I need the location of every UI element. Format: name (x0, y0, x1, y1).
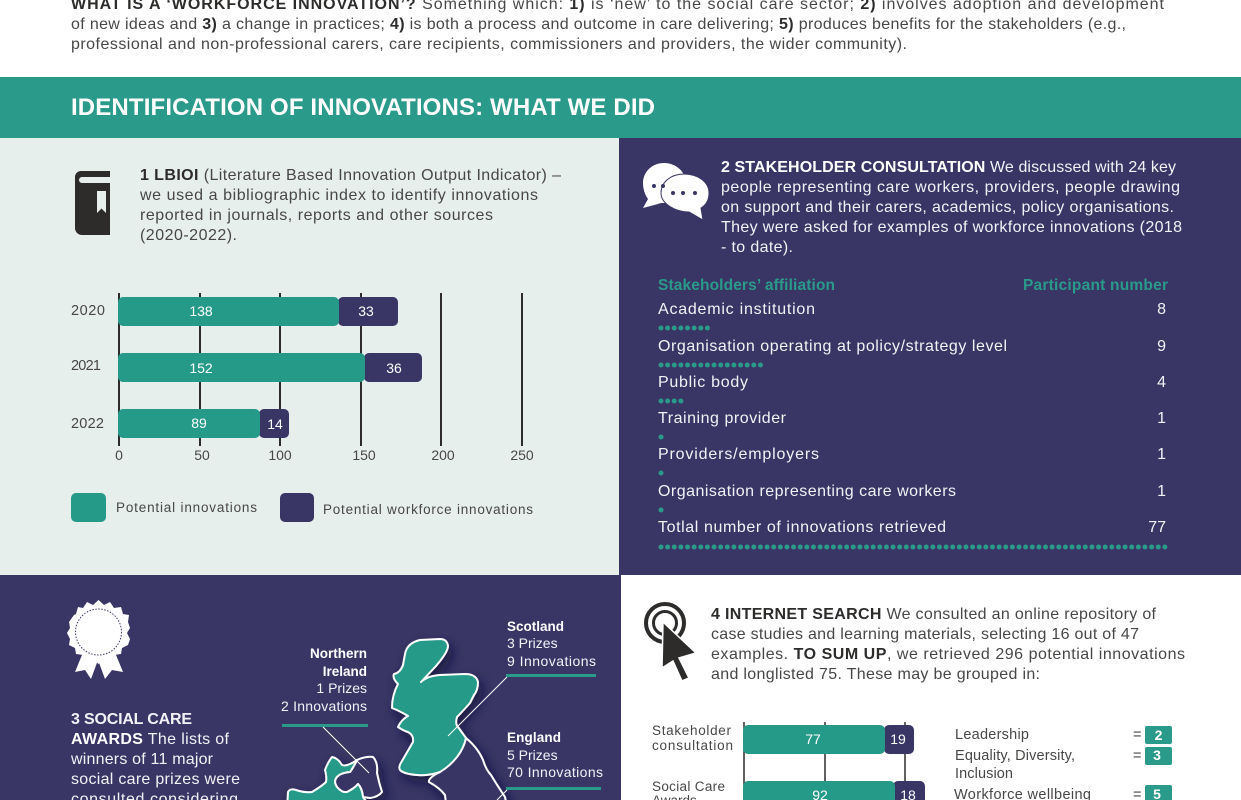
panel: stakeholder consultation (619, 138, 1241, 575)
internet search description: case studies and learning materials, selecting 16 out of 47 (711, 626, 1139, 643)
innovation groups list: Inclusion (955, 766, 1013, 782)
stakeholder table: 4 (1157, 374, 1166, 391)
intro definition text: of new ideas and 3) a change in practices; 4) is both a process and outcome in care delivering; 5) produces benefits for the stakeholders (e.g., (71, 16, 1126, 33)
LBIOI description (139, 167, 561, 244)
LBIOI description: we used a bibliographic index to identify innovations (139, 187, 538, 204)
callout: England (497, 730, 603, 800)
consultation description: on support and their carers, academics, policy organisations. (721, 199, 1174, 216)
stacked bar chart: innovations per year: 2020 (71, 303, 105, 319)
callout: Northern Ireland: Northern (310, 646, 367, 661)
legend (71, 493, 533, 522)
bar chart: sources (652, 722, 925, 800)
bar chart: sources: Social Care (652, 779, 725, 794)
callout: Scotland: 9 Innovations (507, 653, 596, 669)
consultation description: 2 STAKEHOLDER CONSULTATION We discussed with 24 key (721, 159, 1176, 176)
innovation groups list: = (1133, 748, 1141, 764)
stakeholder table: 1 (1157, 483, 1166, 500)
callout: Northern Ireland: 1 Prizes (316, 680, 367, 696)
stacked bar chart: innovations per year: 2022 (71, 416, 104, 432)
intro definition text (71, 0, 1165, 53)
stacked bar chart: innovations per year (71, 293, 534, 463)
stacked bar chart: innovations per year: 150 (352, 447, 376, 463)
awards description (70, 711, 240, 800)
stakeholder table: 1 (1157, 410, 1166, 427)
stakeholder table: Organisation operating at policy/strategy level (658, 338, 1007, 355)
stacked bar chart: innovations per year: 200 (431, 447, 455, 463)
heading band (0, 77, 1241, 138)
LBIOI description: (2020-2022). (140, 227, 237, 244)
stakeholder table: 9 (1157, 338, 1166, 355)
callout: England: England (507, 730, 561, 745)
innovation groups list: 2 (1155, 727, 1163, 743)
callout: Northern Ireland: 2 Innovations (281, 698, 367, 714)
consultation description: people representing care workers, providers, people drawing (721, 179, 1180, 196)
legend: Potential innovations (116, 500, 257, 515)
innovation groups list: Leadership (955, 727, 1029, 743)
stacked bar chart: innovations per year: 14 (267, 416, 283, 432)
stacked bar chart: innovations per year: 50 (194, 447, 210, 463)
stakeholder table: Organisation representing care workers (658, 483, 956, 500)
innovation groups list (954, 726, 1172, 800)
innovation groups list: Equality, Diversity, (955, 748, 1075, 764)
awards description: 3 SOCIAL CARE (71, 711, 192, 728)
panel: internet search (621, 575, 1241, 800)
stacked bar chart: innovations per year: 100 (268, 447, 292, 463)
icon: award rosette (67, 600, 130, 679)
icon: chat bubbles (643, 163, 709, 220)
stacked bar chart: innovations per year: 89 (191, 415, 207, 431)
callout: Northern Ireland: Ireland (323, 664, 367, 679)
icon: cursor click (646, 604, 696, 681)
LBIOI description: reported in journals, reports and other sources (140, 207, 493, 224)
awards description: AWARDS The lists of (71, 731, 230, 748)
innovation groups list: = (1133, 727, 1141, 743)
consultation description: They were asked for examples of workforce innovations (2018 (721, 219, 1182, 236)
bar chart: sources: Stakeholder (652, 723, 732, 738)
LBIOI description: 1 LBIOI (Literature Based Innovation Output Indicator) – (140, 167, 561, 184)
stacked bar chart: innovations per year: 0 (115, 447, 123, 463)
consultation description: - to date). (721, 239, 793, 256)
stakeholder table: Public body (658, 374, 748, 391)
panel: LBIOI (0, 138, 619, 575)
stacked bar chart: innovations per year: 152 (189, 360, 213, 376)
awards description: social care prizes were (71, 771, 240, 788)
stacked bar chart: innovations per year: 138 (189, 303, 213, 319)
heading band: IDENTIFICATION OF INNOVATIONS: WHAT WE DID (71, 94, 655, 121)
stakeholder table: Participant number (1023, 277, 1168, 294)
bar chart: sources: consultation (652, 738, 733, 753)
stakeholder table: Academic institution (658, 301, 815, 318)
callout: England: 70 Innovations (507, 764, 603, 780)
callout: Scotland: Scotland (507, 619, 564, 634)
callout: Scotland: 3 Prizes (507, 635, 558, 651)
callout: Northern Ireland (281, 646, 369, 773)
awards description: winners of 11 major (70, 751, 214, 768)
legend: Potential workforce innovations (323, 502, 533, 517)
stacked bar chart: innovations per year: 2021 (71, 358, 101, 374)
stakeholder table: Training provider (658, 410, 787, 427)
callout: England: 5 Prizes (507, 747, 558, 763)
bar chart: sources: 77 (805, 731, 821, 747)
stacked bar chart: innovations per year: 33 (358, 303, 374, 319)
stakeholder table: 8 (1157, 301, 1166, 318)
internet search description: 4 INTERNET SEARCH We consulted an online repository of (711, 606, 1157, 623)
callout: Scotland (448, 619, 596, 736)
internet search description (711, 606, 1185, 683)
stakeholder table: Totlal number of innovations retrieved (658, 519, 946, 536)
panel: social care awards (0, 575, 621, 800)
internet search description: examples. TO SUM UP, we retrieved 296 potential innovations (711, 646, 1185, 663)
innovation groups list: 3 (1153, 747, 1161, 763)
stacked bar chart: innovations per year: 36 (386, 360, 402, 376)
stakeholder table: 77 (1148, 519, 1166, 536)
stacked bar chart: innovations per year: 250 (510, 447, 534, 463)
stakeholder table (658, 277, 1168, 547)
consultation description (721, 159, 1182, 256)
stakeholder table: Providers/employers (658, 446, 819, 463)
stakeholder table: 1 (1157, 446, 1166, 463)
internet search description: and longlisted 75. These may be grouped in: (711, 666, 1040, 683)
intro definition text: professional and non-professional carers, care recipients, commissioners and providers, the wider community). (71, 36, 907, 53)
map of UK and Ireland (287, 639, 508, 800)
icon: book (75, 171, 110, 235)
bar chart: sources: 19 (890, 731, 906, 747)
stakeholder table: Stakeholders’ affiliation (658, 277, 835, 294)
